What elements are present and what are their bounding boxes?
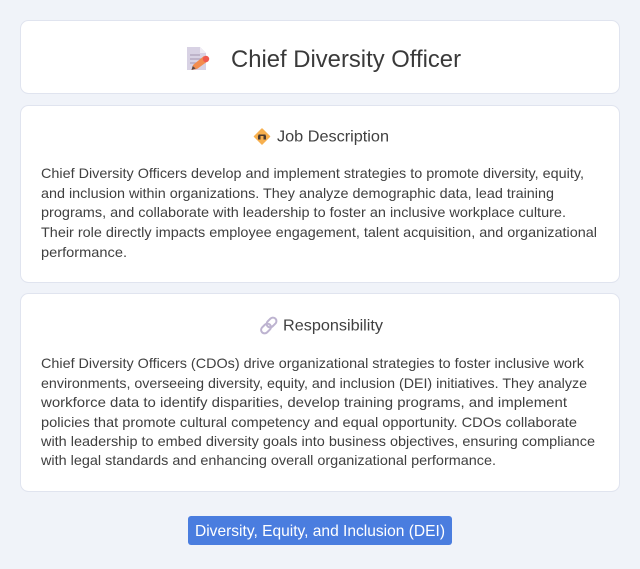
text block: responsibility: with legal standards and enhancing overall organizational performance.: [40, 452, 496, 468]
panel: title header: [20, 20, 620, 94]
text block: responsibility: with leadership to embed diversity goals into business objectives, ensuring compliance: [40, 433, 595, 449]
heading: responsibility: Responsibility: [283, 318, 383, 334]
text block: responsibility: environments, overseeing diversity, equity, and inclusion (DEI) initiatives. They analyze: [41, 375, 587, 391]
panel: responsibility: [20, 294, 620, 492]
title: Chief Diversity Officer: [231, 46, 461, 73]
text block: responsibility: [40, 355, 595, 468]
icon: diamond road sign: [254, 129, 270, 144]
text block: responsibility: policies that promote cultural competency and equal opportunity. CDOs collaborate: [41, 414, 577, 430]
text block: job description: Chief Diversity Officers develop and implement strategies to promote diversity, equity,: [41, 165, 584, 181]
text block: responsibility: workforce data to identify disparities, develop training programs, and implement: [40, 394, 567, 410]
panel: job description: [20, 106, 620, 282]
text block: job description: [41, 165, 597, 260]
icon: chain link: [260, 316, 278, 335]
tag button: DEI: [188, 516, 452, 545]
text block: job description: and inclusion within organizations. They analyze demographic data, lead training: [41, 185, 554, 201]
text block: responsibility: Chief Diversity Officers (CDOs) drive organizational strategies to foster inclusive work: [41, 355, 585, 371]
text block: job description: performance.: [41, 244, 127, 260]
heading: job description: Job Description: [277, 128, 389, 146]
icon: document with pencil: [187, 47, 209, 70]
tag button: DEI: Diversity, Equity, and Inclusion (DEI): [195, 523, 445, 540]
text block: job description: Their role directly impacts employee engagement, talent acquisition, and organizational: [41, 224, 597, 240]
text block: job description: programs, and collaborate with leadership to foster an inclusive workplace culture.: [41, 204, 566, 220]
